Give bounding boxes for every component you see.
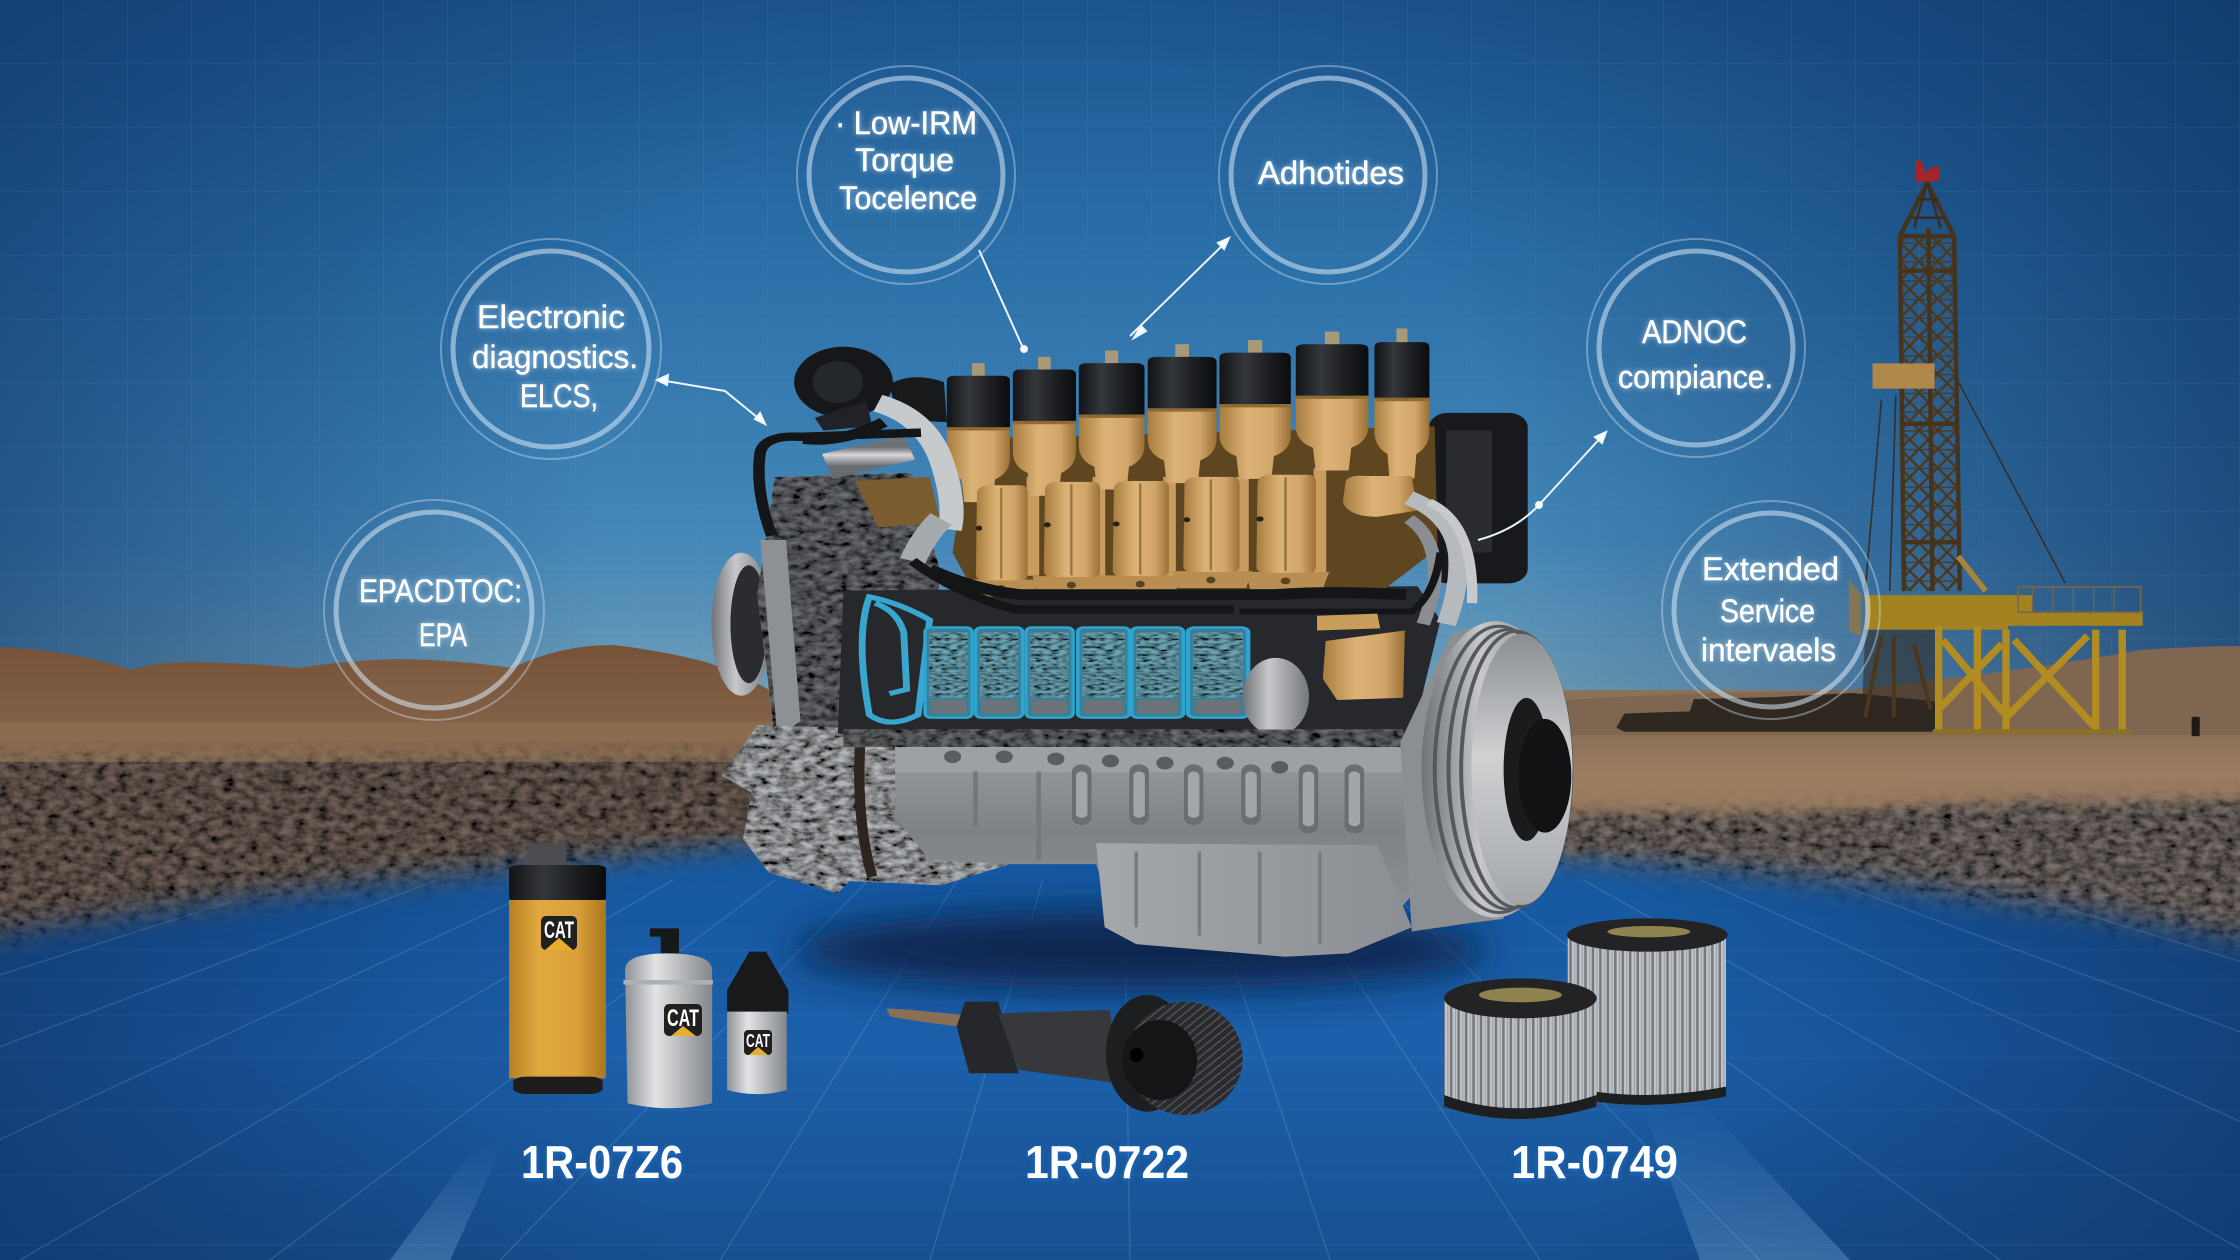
callout: Adhotides: Adhotides: [1258, 155, 1404, 191]
callout: EPA: EPACDTOC:: [359, 573, 522, 609]
background: blue blueprint floor: [0, 840, 2240, 1260]
engine shadow on floor: [790, 910, 1490, 990]
CAT logos: CAT: [544, 917, 574, 944]
derrick tower: [1899, 183, 1960, 591]
part: 1R-0722 actuator: [886, 995, 1243, 1115]
blue coolant hoses: [862, 597, 930, 722]
callout: ADNOC compliance: compiance.: [1618, 359, 1773, 395]
large filter: [1567, 918, 1728, 1105]
yellow canister: [509, 843, 606, 1094]
callout: Adhotides: [1219, 66, 1437, 284]
callout: Extended service intervals: Extended: [1702, 551, 1839, 587]
callout: EPA: [324, 500, 544, 720]
crankcase: [895, 746, 1418, 915]
crown block: [1915, 159, 1939, 182]
gold sump block: [1317, 614, 1405, 700]
callout: Low-IRM Torque Tocelence: Torque: [855, 142, 954, 178]
dark centre band: [838, 586, 1440, 738]
background: sky: [0, 0, 2240, 720]
callout arrows: [657, 238, 1606, 540]
monkey board: [1873, 363, 1935, 389]
background: desert hills and sand: [0, 645, 2240, 830]
callout: Low-IRM Torque Tocelence: [797, 66, 1015, 284]
oil rig: [1616, 159, 2200, 736]
blue electronic modules: [925, 628, 1248, 718]
guy wires: [1865, 383, 2065, 591]
CAT logos: CAT: [746, 1031, 770, 1051]
lower left gear case: [722, 725, 1010, 894]
engine: [711, 328, 1572, 957]
gold junction: [1343, 476, 1418, 517]
callout: Low-IRM Torque Tocelence: · Low-IRM: [835, 105, 977, 141]
oil pan: [1096, 843, 1412, 957]
turbo: [794, 347, 947, 431]
ground equipment: [1616, 693, 1939, 732]
compressor: [1242, 658, 1309, 735]
callout: ADNOC compliance: ADNOC: [1642, 314, 1747, 350]
fuel rail chain: [844, 729, 1403, 747]
part: 1R-0749 air filters: [1444, 918, 1728, 1119]
small filter: [1444, 978, 1597, 1119]
callout: Extended service intervals: intervaels: [1701, 632, 1836, 668]
left machinery: [757, 473, 941, 763]
gold engine backing: [953, 426, 1438, 595]
part number: 1R-07Z6: 1R-07Z6: [521, 1136, 683, 1188]
callout: ADNOC compliance: [1587, 239, 1805, 457]
silver canister: [623, 928, 713, 1108]
rear housing, black: [1429, 413, 1528, 583]
arrow: electronic diagnostics: [657, 375, 765, 424]
gold pillars: [1033, 468, 1320, 576]
callout: Electronic diagnostics ELCS: diagnostics.: [472, 339, 638, 375]
callout: Extended service intervals: Service: [1720, 593, 1815, 629]
callout: Electronic diagnostics ELCS: ELCS,: [520, 378, 598, 414]
callout: EPA: EPA: [419, 617, 468, 653]
callout: Electronic diagnostics ELCS: [441, 239, 661, 459]
arrow: ADNOC compliance: [1478, 432, 1606, 540]
callout: Low-IRM Torque Tocelence: Tocelence: [839, 180, 977, 216]
silver exhaust pipes: [827, 403, 1472, 624]
arrow: low-rpm torque: [979, 250, 1027, 352]
cylinder heads: [947, 328, 1429, 502]
rig substructure: [1865, 626, 2130, 734]
callout: Electronic diagnostics ELCS: Electronic: [477, 299, 625, 335]
callout: Extended service intervals: [1662, 501, 1880, 719]
CAT logos: [541, 916, 772, 1055]
background: rocky ground band left: [0, 740, 760, 952]
part number: 1R-0749: 1R-0749: [1511, 1136, 1678, 1188]
small canister: [727, 952, 788, 1094]
left pulley: [711, 553, 771, 696]
gold castings: [965, 475, 1329, 596]
arrow: additives: [1130, 238, 1229, 338]
rig deck: [1849, 579, 2143, 730]
black hoses and harness: [759, 422, 1440, 612]
background: rocky ground band right: [1554, 782, 2240, 956]
part number: 1R-0722: 1R-0722: [1025, 1136, 1189, 1188]
parts group: 1R-07Z6 canisters: [509, 843, 788, 1108]
CAT logos: CAT: [667, 1005, 699, 1032]
flywheel: [1400, 620, 1572, 932]
